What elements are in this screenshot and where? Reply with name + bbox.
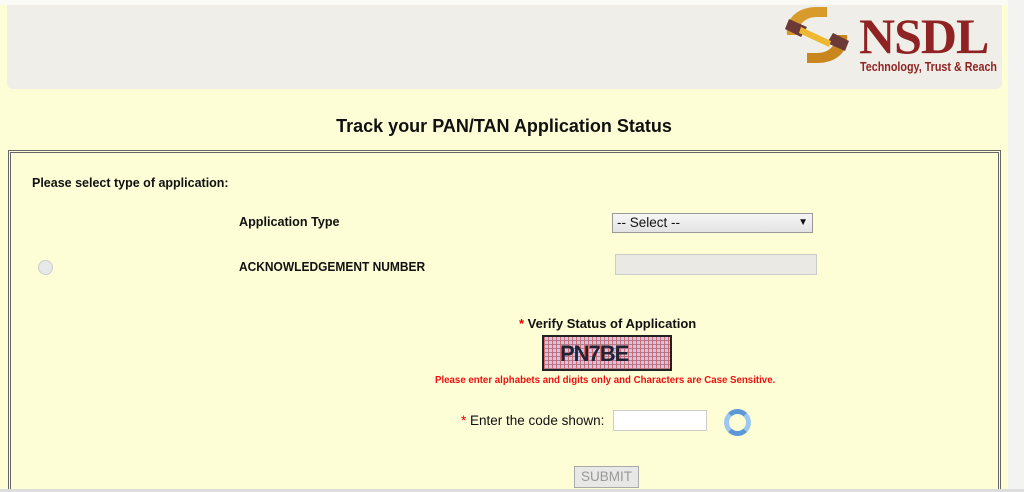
- icon: refresh: [724, 409, 751, 436]
- panel: form: [8, 150, 1001, 492]
- submit button: SUBMIT: [581, 469, 632, 484]
- submit button: [574, 466, 639, 488]
- select dropdown: ▼: [798, 217, 808, 228]
- radio button: [38, 260, 53, 275]
- tagline: Technology, Trust & Reach: [860, 60, 997, 74]
- select dropdown: [612, 213, 813, 233]
- captcha image: [542, 335, 672, 371]
- prompt text: Please select type of application:: [32, 176, 229, 190]
- title: Track your PAN/TAN Application Status: [336, 116, 672, 136]
- label: application type: Application Type: [239, 215, 340, 229]
- captcha image: PN7BE: [560, 341, 628, 366]
- label: acknowledgement number: ACKNOWLEDGEMENT NUMBER: [239, 260, 425, 274]
- warning text: Please enter alphabets and digits only and Characters are Case Sensitive.: [435, 375, 775, 386]
- icon: NSDL logo: [785, 7, 849, 63]
- code label: * Enter the code shown:: [461, 413, 604, 428]
- captcha heading: * Verify Status of Application: [519, 316, 696, 331]
- header banner: [7, 5, 1002, 89]
- code input: [613, 410, 707, 431]
- disabled input: [615, 254, 817, 275]
- logo text: NSDL: [859, 8, 988, 64]
- select dropdown: -- Select --: [617, 215, 680, 230]
